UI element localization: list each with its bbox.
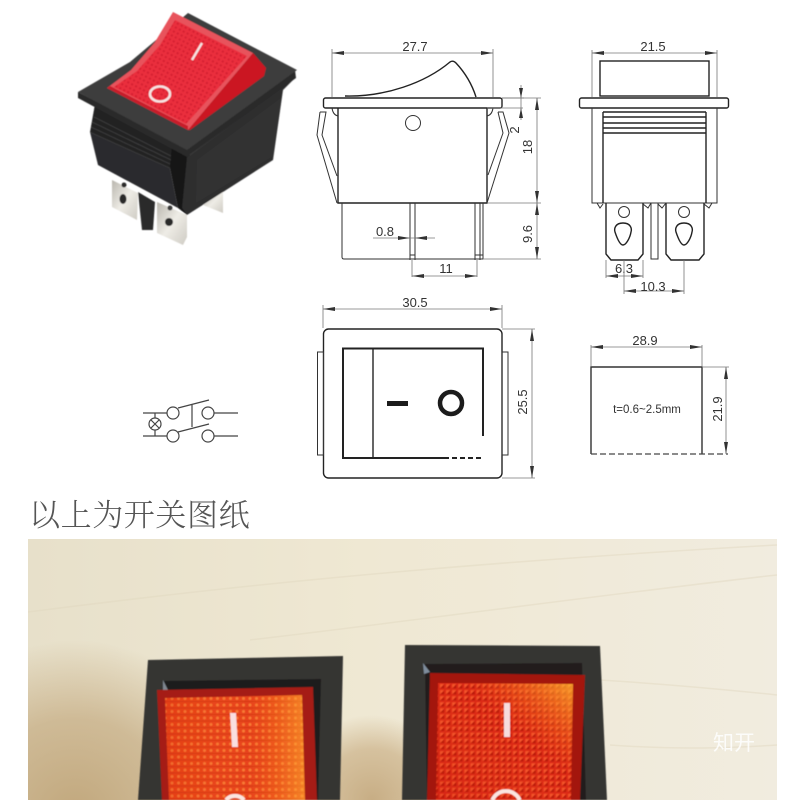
- body: left face: [90, 132, 178, 208]
- dimension: 27.7: 27.7: [402, 39, 428, 54]
- clip feet: [597, 203, 712, 208]
- right switch: [402, 645, 607, 800]
- body: [338, 108, 487, 203]
- left switch: [138, 656, 343, 800]
- inner body: [603, 112, 706, 203]
- right tab: [502, 352, 508, 455]
- body: right face: [182, 78, 295, 215]
- window divider: [372, 348, 374, 458]
- dimension: 0.8: [373, 224, 435, 240]
- dimension: 2: 2: [507, 126, 522, 134]
- top view drawing: [318, 295, 535, 478]
- dimension: 30.5: [323, 295, 502, 328]
- dimension: 10.3: 10.3: [640, 279, 666, 294]
- dimension: 0.8: 0.8: [376, 224, 394, 239]
- dimension: 10.3: [624, 260, 684, 294]
- front terminal: [157, 202, 187, 245]
- dimension: 11: [412, 260, 477, 278]
- dimension: 21.5: [592, 39, 717, 97]
- rocker outline: [345, 61, 476, 97]
- right clip: [487, 112, 509, 203]
- dimension: 6.3: 6.3: [615, 261, 633, 276]
- product photo: rocker switch: [78, 12, 297, 245]
- rocker rectangle: [600, 61, 709, 96]
- rocker top face: [107, 12, 253, 130]
- rocker window: [343, 348, 483, 458]
- left terminal: [112, 180, 138, 220]
- terminal blades: [410, 203, 483, 260]
- side view drawing: [317, 39, 541, 278]
- cutout dashed edge: [591, 453, 728, 455]
- left clip: [317, 112, 337, 203]
- panel cutout drawing: [591, 333, 729, 454]
- photo of two switches: [28, 539, 777, 800]
- dimension: 6.3: [606, 260, 643, 278]
- rocker bottom edge: [107, 86, 188, 130]
- body: gap shadow: [168, 146, 190, 215]
- rocker mark: O: [150, 86, 170, 102]
- terminals base: [342, 203, 483, 259]
- rocker mark: I: [192, 43, 202, 60]
- outer frame: [324, 329, 502, 478]
- dimension: 27.7: [332, 39, 493, 97]
- flange: [324, 98, 502, 108]
- end view drawing: [580, 39, 728, 294]
- dimension: 25.5: [502, 329, 535, 478]
- corner fillets: [332, 108, 493, 116]
- rocker shadow side: [188, 53, 266, 130]
- dimension: 21.9: 21.9: [710, 396, 725, 422]
- lamp hole: [406, 116, 420, 130]
- cutout outline: [591, 367, 702, 454]
- mark: dash: [387, 401, 408, 406]
- dimension: 21.5: 21.5: [640, 39, 666, 54]
- thickness label: t=0.6~2.5mm: [613, 404, 681, 416]
- centre post: [651, 203, 658, 259]
- dimension: 2: [487, 85, 524, 134]
- watermark: 知开: [713, 732, 755, 755]
- right terminal: [666, 203, 704, 260]
- centre post: [138, 192, 155, 230]
- dimension: 9.6: [483, 203, 541, 259]
- bezel side: [78, 70, 296, 157]
- circuit symbol: [143, 400, 238, 442]
- outer body: [592, 108, 717, 203]
- clip with ribs: [90, 104, 172, 168]
- shadow between switches: [304, 720, 442, 800]
- photo background: [28, 539, 777, 800]
- back terminal: [203, 192, 223, 213]
- dimension: 18: 18: [520, 140, 535, 154]
- dimension: 28.9: 28.9: [632, 333, 658, 348]
- dimension: 18: [487, 98, 541, 203]
- left terminal: [606, 203, 643, 260]
- wood grain: [277, 544, 777, 748]
- dimension: 11: 11: [439, 261, 453, 276]
- bezel top: [78, 13, 297, 150]
- heading: 以上为开关图纸: [29, 498, 250, 533]
- left tab: [318, 352, 324, 455]
- warm shadow left: [28, 652, 214, 800]
- mark: circle: [440, 392, 462, 414]
- dimension: 25.5: 25.5: [515, 389, 530, 415]
- dimension: 30.5: 30.5: [402, 295, 428, 310]
- dimension: 9.6: 9.6: [520, 225, 535, 243]
- window dashed corner: [444, 457, 483, 459]
- ribs: [603, 112, 706, 133]
- flange: [580, 98, 728, 108]
